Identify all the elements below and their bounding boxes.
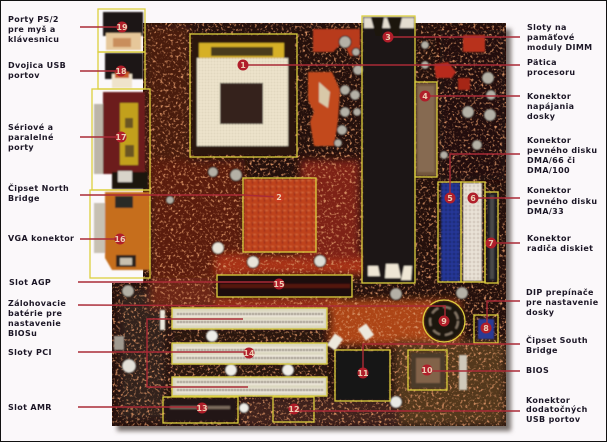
left labels: Bridge	[8, 194, 40, 203]
leader lines	[78, 27, 520, 411]
right labels: pevného disku	[527, 196, 597, 206]
right labels: USB portov	[526, 415, 581, 424]
serial and parallel connector	[94, 104, 108, 174]
number badges: 18	[115, 67, 127, 76]
processor socket	[192, 35, 295, 155]
right labels: pre nastavenie	[526, 298, 599, 307]
left labels: VGA konektor	[8, 234, 74, 243]
DIMM slots	[363, 17, 415, 283]
right labels: pevného disku	[527, 145, 597, 155]
left labels: pre myš a	[8, 24, 56, 34]
left labels: paralelné	[8, 132, 54, 142]
left labels: portov	[8, 71, 40, 80]
left labels	[8, 15, 74, 412]
AGP slot	[217, 275, 352, 297]
number badges: 17	[115, 133, 127, 142]
left labels: nastavenie	[8, 319, 61, 328]
ports 19 and 18	[103, 12, 143, 36]
right labels	[526, 23, 599, 424]
number badges: 4	[422, 92, 428, 101]
yellow highlight frames	[90, 9, 498, 423]
south bridge chip	[336, 351, 389, 400]
number badges: 5	[447, 194, 453, 203]
number badges: 12	[288, 405, 300, 414]
battery	[424, 301, 464, 341]
left labels: BIOSu	[8, 329, 37, 338]
right labels: Konektor	[526, 396, 570, 405]
number badges: 1	[240, 61, 246, 70]
board colour regions	[112, 23, 507, 427]
number badges: 7	[488, 239, 494, 248]
number badges	[114, 22, 496, 414]
power connector	[416, 83, 437, 176]
IDE and floppy connectors	[441, 183, 460, 281]
right labels: BIOS	[526, 366, 549, 375]
number badges: 14	[243, 349, 255, 358]
right labels: dodatočných	[526, 404, 588, 414]
number badges: 19	[116, 23, 128, 32]
right labels: Sloty na	[527, 23, 567, 32]
right labels: Pätica	[527, 58, 557, 67]
left labels: Dvojica USB	[8, 61, 66, 70]
right labels: Konektor	[527, 186, 571, 195]
motherboard photo	[94, 12, 511, 431]
right labels: Konektor	[527, 92, 571, 101]
right labels: Bridge	[526, 346, 558, 355]
right labels: DMA/33	[527, 207, 564, 216]
left labels: Slot AMR	[8, 403, 52, 412]
right labels: pamäťové	[527, 32, 575, 42]
number badges: 2	[276, 193, 282, 202]
right labels: napájania	[527, 102, 574, 111]
right labels: Konektor	[527, 136, 571, 145]
left labels: Čipset North	[8, 182, 69, 193]
left labels: batérie pre	[8, 308, 63, 318]
number badges: 13	[196, 404, 208, 413]
number badges: 16	[114, 235, 126, 244]
right labels: moduly DIMM	[527, 43, 592, 52]
right labels: dosky	[527, 112, 556, 121]
north bridge chip	[244, 179, 316, 252]
number badges: 11	[357, 369, 369, 378]
right labels: procesoru	[527, 68, 575, 77]
number badges: 15	[273, 280, 285, 289]
right labels: dosky	[526, 308, 555, 317]
left labels: Sériové a	[8, 122, 53, 132]
right labels: radiča diskiet	[527, 243, 593, 253]
VGA connector	[94, 203, 106, 253]
right labels: DIP prepínače	[526, 287, 594, 297]
left labels: Sloty PCI	[8, 348, 52, 357]
right labels: DMA/100	[527, 166, 570, 175]
orange regions near socket	[313, 29, 360, 56]
DIP switch	[478, 319, 494, 339]
BIOS chip	[411, 353, 445, 388]
number badges: 9	[441, 317, 447, 326]
number badges: 10	[421, 366, 433, 375]
AMR slot	[165, 399, 236, 421]
right labels: Konektor	[527, 234, 571, 243]
left labels: Slot AGP	[9, 278, 51, 287]
left labels: porty	[8, 143, 34, 152]
right labels: DMA/66 či	[527, 155, 575, 165]
white components	[327, 333, 343, 351]
capacitors	[122, 36, 496, 413]
PCI slots	[172, 308, 327, 329]
left labels: Zálohovacie	[8, 299, 66, 308]
right labels: Čipset South	[526, 334, 588, 345]
number badges: 8	[483, 324, 489, 333]
number badges: 3	[385, 33, 391, 42]
left labels: Porty PS/2	[8, 15, 59, 24]
number badges: 6	[470, 194, 476, 203]
left labels: klávesnicu	[8, 35, 59, 44]
